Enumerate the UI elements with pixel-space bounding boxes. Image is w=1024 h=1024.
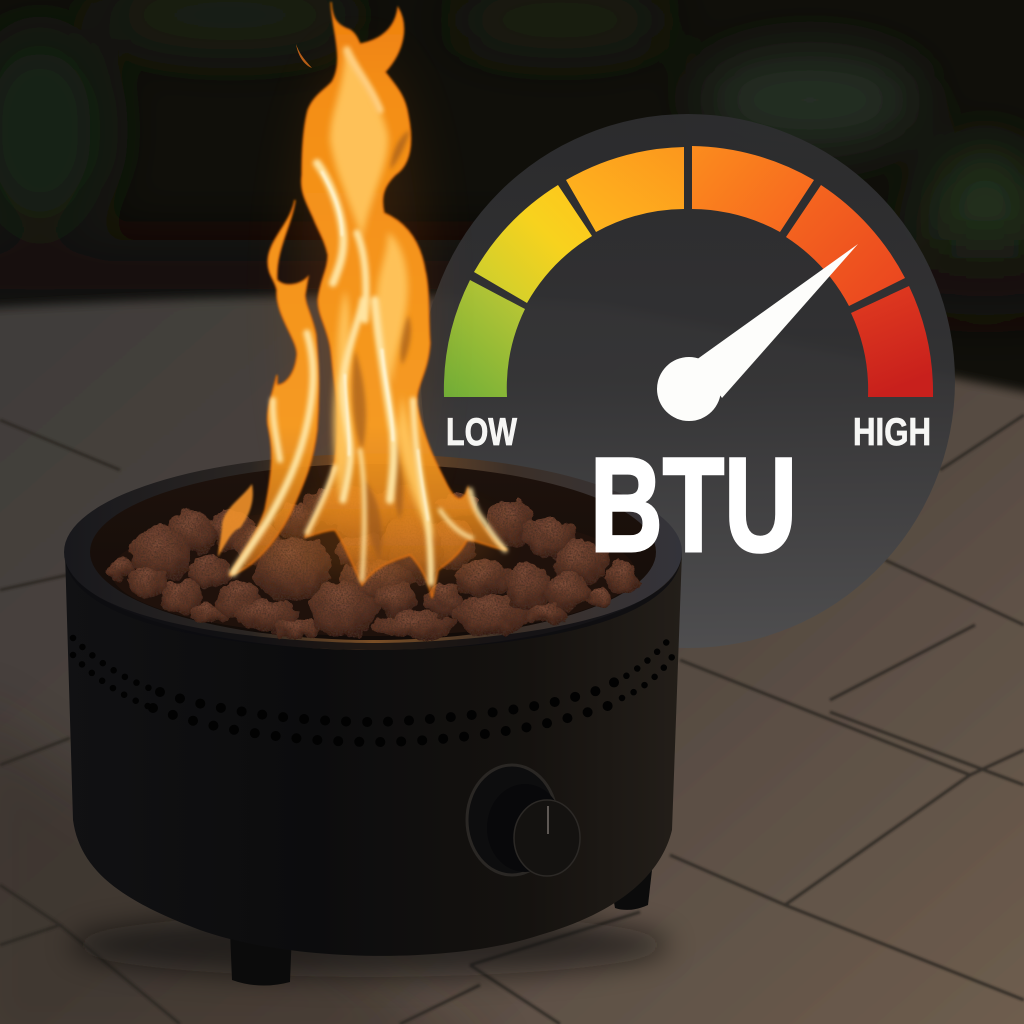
white-hot core [322, 172, 428, 520]
gauge dial [444, 146, 933, 580]
rim [64, 454, 682, 650]
gauge segment: red [851, 286, 933, 397]
feet [230, 870, 652, 986]
gauge dial disc [421, 114, 955, 648]
central flame mass [302, 2, 507, 598]
lighter flame bodies [330, 45, 434, 540]
lava rocks [106, 487, 639, 639]
gauge segment: yellow [474, 185, 592, 303]
gauge segment: green [444, 280, 525, 397]
small left flame [218, 484, 253, 557]
pit body [65, 552, 682, 956]
bright flame streaks [233, 50, 505, 583]
side wisp [296, 44, 312, 68]
fire pit [64, 454, 682, 986]
flames [218, 2, 507, 598]
label: BTU: BTU [590, 431, 797, 580]
flame glow [300, 60, 420, 540]
background: dark garden [0, 0, 1024, 450]
gauge segment: red-orange [786, 185, 905, 306]
control knob [467, 765, 580, 876]
fire glow on rocks [240, 500, 500, 580]
gauge segment: orange [692, 146, 814, 232]
perforated band [73, 635, 675, 742]
pit interior [90, 464, 656, 640]
dark translucent gaps [352, 130, 411, 560]
patio pavers [0, 296, 1024, 1024]
rock bed shadow [111, 508, 635, 636]
label: low: LOW [446, 411, 517, 454]
needle [657, 244, 858, 421]
gauge segment: amber [566, 147, 684, 232]
label: high: HIGH [853, 411, 931, 454]
left flame tongue [230, 200, 319, 575]
